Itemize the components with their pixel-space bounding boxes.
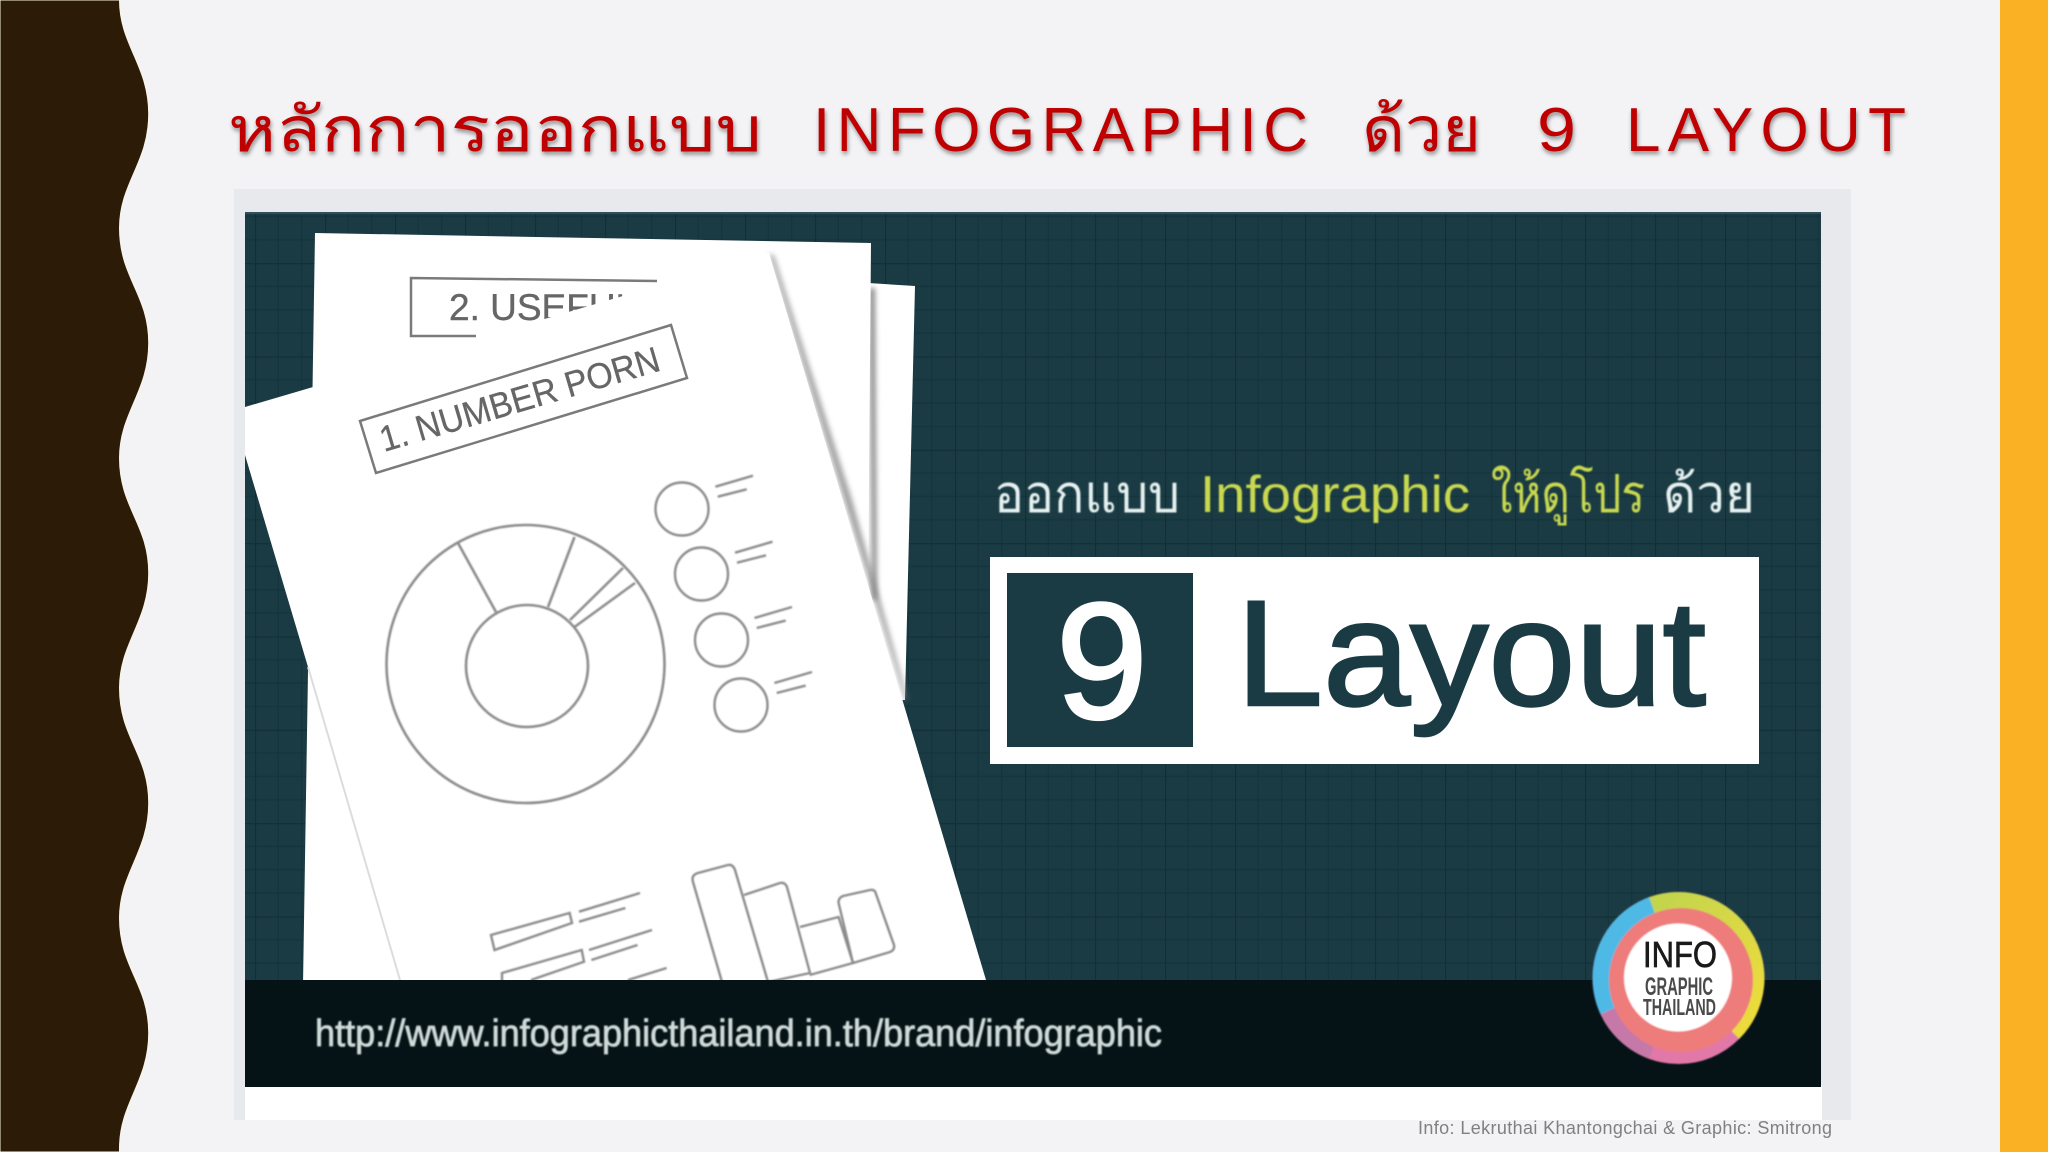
panel: poster image frame — [234, 189, 1851, 1120]
title: 9 — [1537, 96, 1576, 165]
credit line: Info: Lekruthai Khantongchai & Graphic: Smitrong — [1418, 1118, 1832, 1138]
title: ด้วย — [1362, 96, 1481, 165]
logo: Infographic Thailand: THAILAND — [1643, 994, 1716, 1020]
title: หลักการออกแบบ — [228, 96, 762, 165]
title — [228, 96, 1906, 165]
heading line — [994, 465, 1755, 526]
bar chart — [693, 865, 894, 982]
paper: second sheet — [303, 233, 910, 985]
title: INFOGRAPHIC — [813, 96, 1308, 165]
label: 1. NUMBER PORN: 1. NUMBER PORN — [375, 338, 664, 460]
heading line: ให้ดูโปร — [1491, 465, 1645, 526]
heading line: ออกแบบ — [994, 466, 1180, 524]
paper: third sheet — [860, 283, 915, 700]
title box: 9 Layout: 9 — [1056, 569, 1148, 753]
list rows — [491, 893, 667, 982]
logo: Infographic Thailand: INFO — [1643, 934, 1717, 975]
title box: 9 Layout: Layout — [1236, 569, 1706, 737]
heading line: ด้วย — [1663, 466, 1755, 524]
donut chart — [386, 525, 664, 803]
label: 2. USEFUL: 2. USEFUL — [449, 287, 636, 328]
logo: Infographic Thailand — [1592, 892, 1764, 1064]
heading line: Infographic — [1200, 466, 1470, 524]
url text: http://www.infographicthailand.in.th/brand/infographic — [315, 1013, 1162, 1055]
label: 2. USEFUL — [411, 278, 657, 336]
logo: Infographic Thailand: GRAPHIC — [1645, 973, 1713, 1001]
right yellow band — [2000, 0, 2048, 1152]
title box: 9 Layout — [990, 557, 1759, 764]
footer strip — [245, 980, 1821, 1087]
left wavy dark band — [0, 0, 149, 1152]
title: LAYOUT — [1626, 96, 1906, 165]
legend circles — [656, 476, 812, 732]
paper: front sheet — [245, 253, 986, 982]
